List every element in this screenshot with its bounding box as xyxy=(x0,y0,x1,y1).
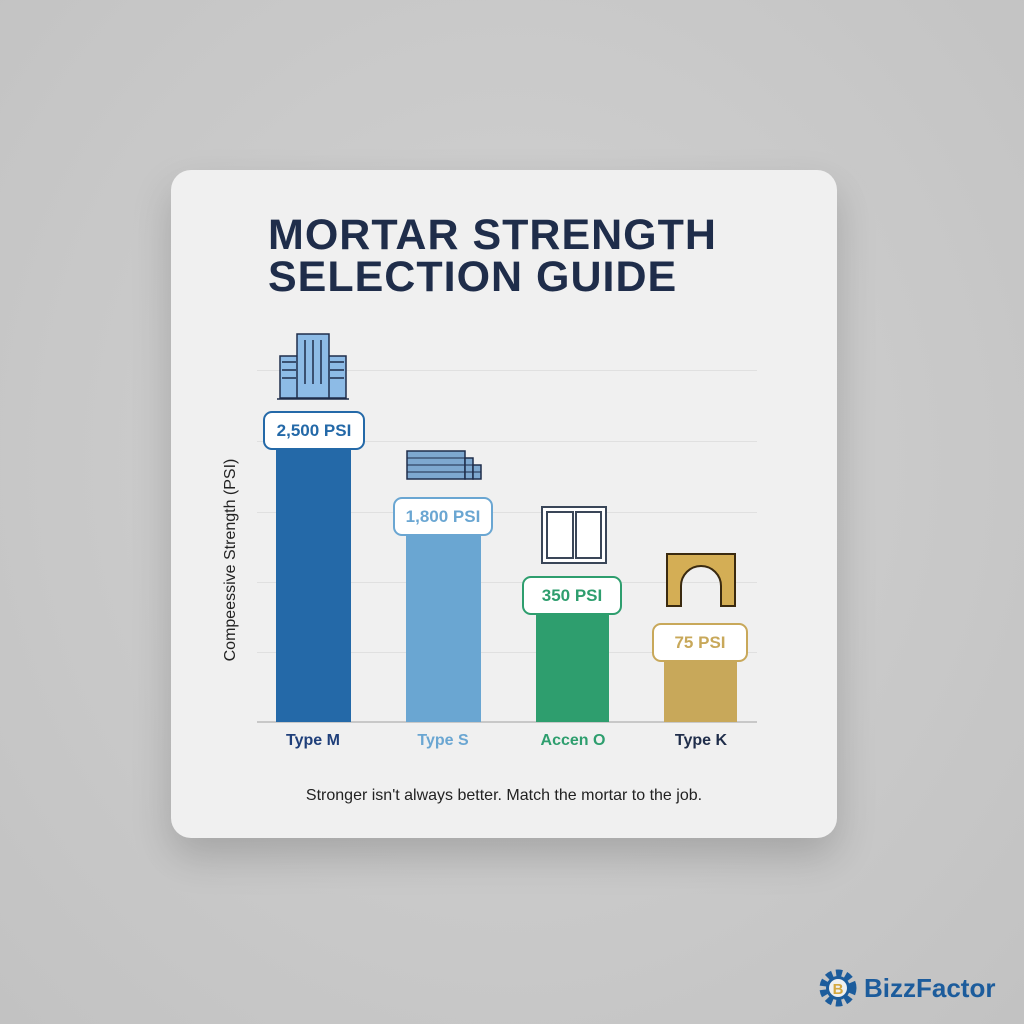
label: 350 PSI: 350 PSI xyxy=(542,586,602,605)
label: 75 PSI: 75 PSI xyxy=(674,633,726,652)
card xyxy=(171,170,837,838)
card: Type S xyxy=(417,732,469,749)
label: 350 PSI xyxy=(522,576,622,615)
label: 75 PSI xyxy=(652,623,748,662)
x labels: Type M xyxy=(286,732,340,749)
card: Type K xyxy=(675,732,727,749)
bar: Type M xyxy=(276,450,351,722)
title: SELECTION GUIDE xyxy=(268,253,677,301)
logo: B xyxy=(833,981,844,998)
label: 2,500 PSI: 2,500 PSI xyxy=(277,421,351,440)
label: 1,800 PSI xyxy=(393,497,493,536)
icon: brick wall xyxy=(406,450,482,480)
label: 1,800 PSI: 1,800 PSI xyxy=(406,507,480,526)
axis label: Compeessive Strength (PSI) xyxy=(222,459,239,661)
title: MORTAR STRENGTH xyxy=(268,211,717,259)
card: Accen O xyxy=(541,732,605,749)
logo: BizzFactor xyxy=(864,973,995,1003)
bar: Type K xyxy=(664,661,737,722)
logo xyxy=(820,970,996,1006)
label: 2,500 PSI xyxy=(263,411,365,450)
icon: building xyxy=(277,333,349,400)
footnote: Stronger isn't always better. Match the mortar to the job. xyxy=(306,787,702,804)
title xyxy=(268,211,717,301)
icon: arch xyxy=(666,553,736,607)
bar: Type S xyxy=(406,535,481,722)
icon: window xyxy=(541,506,607,564)
bar: Type O xyxy=(536,614,609,722)
